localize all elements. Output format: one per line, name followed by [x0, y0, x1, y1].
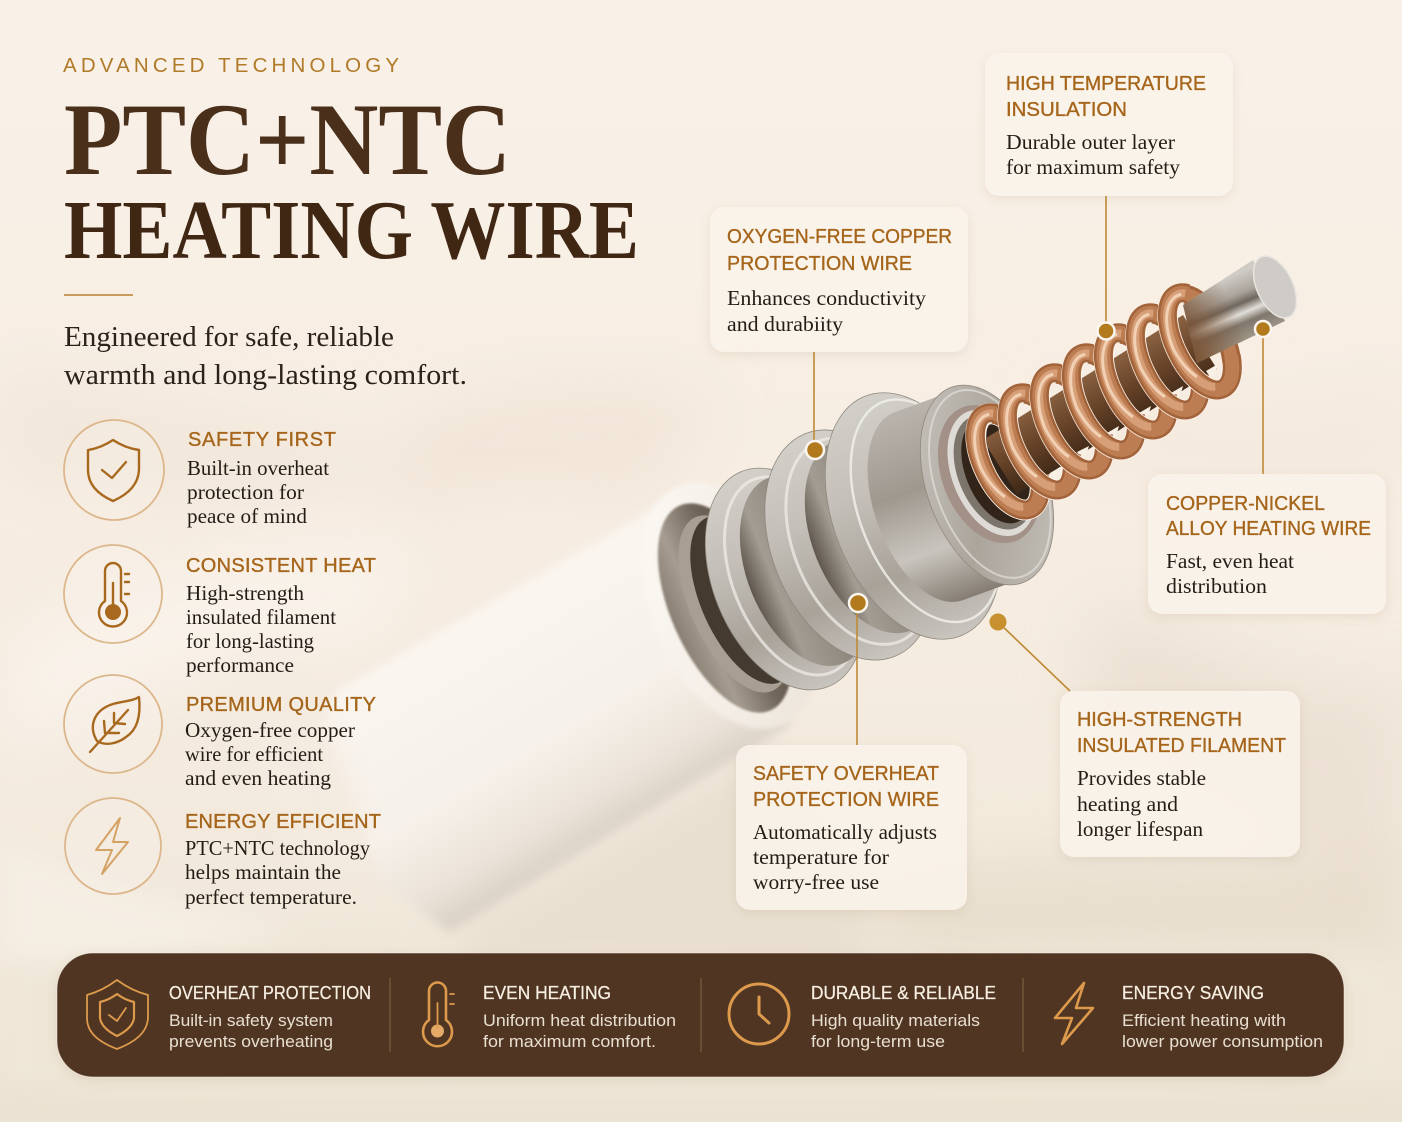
icon: thermometer: [423, 982, 454, 1046]
feature: energy efficient: perfect temperature.: [185, 885, 357, 909]
benefit: even heating: for maximum comfort.: [483, 1032, 656, 1051]
benefit: energy saving: Efficient heating with: [1122, 1011, 1286, 1030]
benefit: durable and reliable: DURABLE & RELIABLE: [811, 983, 996, 1003]
title: [64, 83, 639, 277]
benefit: overheat protection: Built-in safety system: [169, 1011, 333, 1030]
leader line: high temperature insulation: [1098, 195, 1114, 340]
callout: copper-nickel alloy heating wire: [1148, 474, 1386, 614]
callout: high temperature insulation: HIGH TEMPERATURE: [1006, 73, 1206, 95]
callout: high temperature insulation: INSULATION: [1006, 99, 1127, 121]
callout: oxygen-free copper protection wire: and durabiity: [727, 312, 844, 336]
feature: premium quality: PREMIUM QUALITY: [186, 694, 376, 716]
benefit: overheat protection: [87, 980, 371, 1051]
callout: safety overheat protection wire: [736, 745, 967, 910]
benefit: even heating: Uniform heat distribution: [483, 1011, 676, 1030]
feature: consistent heat: for long-lasting: [186, 629, 314, 653]
dark rear ring: [630, 480, 827, 732]
leader line: safety overheat: [849, 594, 867, 745]
subtitle: [64, 295, 467, 391]
benefit: even heating: [423, 982, 676, 1051]
bearing hole: [919, 390, 1060, 558]
feature: consistent heat: insulated filament: [186, 605, 336, 629]
callout: safety overheat protection wire: SAFETY OVERHEAT: [753, 763, 939, 785]
leader line: copper-nickel: [1255, 321, 1271, 474]
feature: consistent heat: performance: [186, 653, 294, 677]
subtitle: warmth and long-lasting comfort.: [64, 359, 467, 391]
benefit: durable and reliable: [729, 983, 996, 1051]
subtitle: Engineered for safe, reliable: [64, 321, 394, 353]
callout: copper-nickel alloy heating wire: Fast, even heat: [1166, 549, 1294, 573]
metal protection rings: [630, 366, 1079, 732]
callout: high temperature insulation: for maximum safety: [1006, 155, 1181, 179]
callout: safety overheat protection wire: Automatically adjusts: [753, 820, 937, 844]
callout: oxygen-free copper protection wire: PROTECTION WIRE: [727, 253, 912, 275]
icon: clock: [729, 984, 789, 1044]
callout: high temperature insulation: Durable outer layer: [1006, 130, 1175, 154]
wire illustration: [211, 249, 1305, 933]
title: PTC+NTC: [64, 83, 511, 197]
benefit: durable and reliable: for long-term use: [811, 1032, 945, 1051]
icon: leaf: [64, 675, 162, 773]
eyebrow: ADVANCED TECHNOLOGY: [63, 54, 399, 77]
callout: safety overheat protection wire: PROTECTION WIRE: [753, 789, 939, 811]
callout: high-strength insulated filament: HIGH-STRENGTH: [1077, 709, 1242, 731]
callout: high-strength insulated filament: Provides stable: [1077, 766, 1206, 790]
feature: consistent heat: CONSISTENT HEAT: [186, 555, 376, 577]
feature: premium quality: [64, 675, 376, 790]
callout: copper-nickel alloy heating wire: COPPER-NICKEL: [1166, 493, 1325, 515]
bottom benefits bar: [57, 953, 1344, 1077]
leader line: insulated filament: [990, 614, 1070, 691]
callout: safety overheat protection wire: worry-free use: [753, 870, 879, 894]
feature: energy efficient: [65, 798, 381, 909]
feature: safety first: Built-in overheat: [187, 456, 329, 480]
copper coil: [960, 284, 1243, 521]
benefit: even heating: EVEN HEATING: [483, 983, 611, 1003]
feature: safety first: SAFETY FIRST: [188, 429, 336, 451]
benefit: overheat protection: prevents overheating: [169, 1032, 333, 1051]
feature: premium quality: Oxygen-free copper: [185, 718, 355, 742]
coil rear halves: [963, 284, 1245, 520]
benefit: energy saving: ENERGY SAVING: [1122, 983, 1264, 1003]
callout: high temperature insulation: [985, 53, 1233, 196]
callout: oxygen-free copper protection wire: Enhances conductivity: [727, 286, 927, 310]
benefit: energy saving: [1055, 983, 1323, 1051]
white insulation tube: [211, 456, 854, 933]
callout: safety overheat protection wire: temperature for: [753, 845, 889, 869]
icon: shield: [64, 420, 164, 520]
feature: energy efficient: ENERGY EFFICIENT: [185, 811, 381, 833]
benefit: durable and reliable: High quality materials: [811, 1011, 980, 1030]
copper core and steel rod: [983, 249, 1305, 494]
feature: energy efficient: PTC+NTC technology: [185, 836, 370, 860]
callout: high-strength insulated filament: [1060, 691, 1300, 857]
disc A: [675, 441, 903, 714]
bearing body: [842, 367, 1079, 622]
benefit: energy saving: lower power consumption: [1122, 1032, 1323, 1051]
feature: safety first: protection for: [187, 480, 304, 504]
callout: oxygen-free copper protection wire: [710, 207, 968, 352]
callout: high-strength insulated filament: INSULATED FILAMENT: [1077, 735, 1286, 757]
feature: consistent heat: [64, 545, 376, 677]
disc B: [733, 402, 973, 685]
callout: high-strength insulated filament: longer lifespan: [1077, 817, 1204, 841]
callout: oxygen-free copper protection wire: OXYGEN-FREE COPPER: [727, 226, 952, 248]
title: HEATING WIRE: [64, 184, 639, 277]
icon: lightning bolt: [1055, 983, 1093, 1044]
leader line: oxygen-free copper: [806, 352, 824, 459]
icon: lightning bolt: [65, 798, 161, 894]
feature: safety first: [64, 420, 336, 528]
callout: copper-nickel alloy heating wire: ALLOY HEATING WIRE: [1166, 518, 1371, 540]
feature: consistent heat: High-strength: [186, 581, 304, 605]
icon: shield: [87, 980, 148, 1049]
feature: safety first: peace of mind: [187, 504, 307, 528]
disc C: [791, 366, 1035, 665]
feature: premium quality: wire for efficient: [185, 742, 323, 766]
icon: thermometer: [64, 545, 162, 643]
callout: high-strength insulated filament: heating and: [1077, 792, 1179, 816]
feature: energy efficient: helps maintain the: [185, 860, 341, 884]
callout: copper-nickel alloy heating wire: distribution: [1166, 574, 1268, 598]
benefit: overheat protection: OVERHEAT PROTECTION: [169, 983, 371, 1003]
feature: premium quality: and even heating: [185, 766, 332, 790]
